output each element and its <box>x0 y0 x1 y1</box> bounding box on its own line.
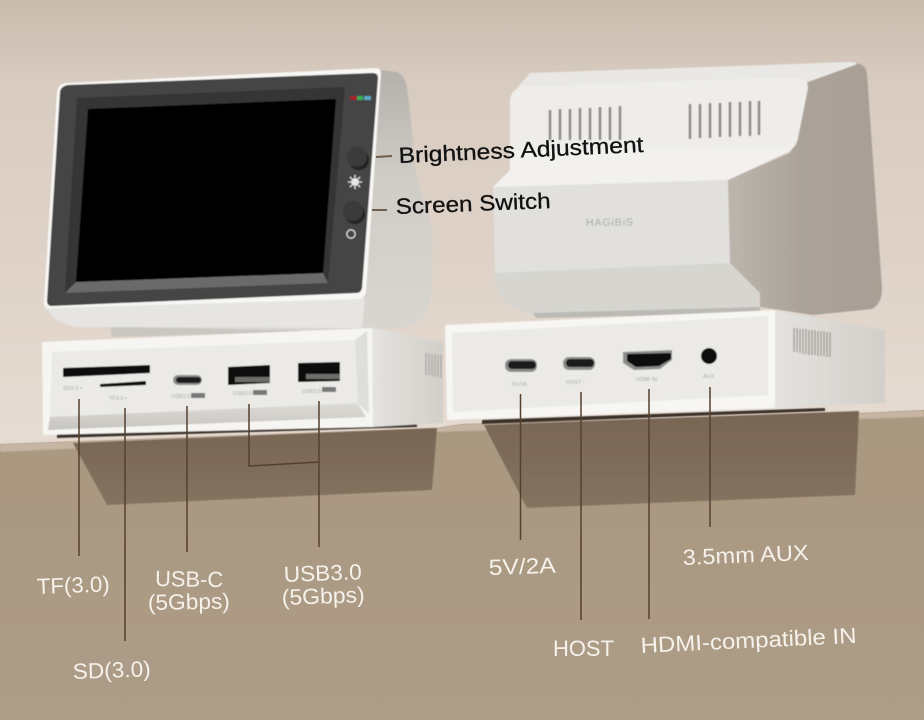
port labels: 5V/2A <box>512 382 527 388</box>
port labels: AUX <box>703 374 715 380</box>
back vented face <box>493 77 808 187</box>
shelf surface <box>0 410 924 720</box>
label: USB-C: USB-C <box>155 566 223 592</box>
label: 5V/2A: 5V/2A <box>488 553 556 580</box>
USB-A port 1 <box>228 365 270 385</box>
dock side <box>372 328 443 427</box>
left device: screen unit <box>44 68 432 337</box>
SD slot <box>63 365 150 377</box>
label: HOST: HOST <box>553 636 614 661</box>
dock underside line <box>57 423 417 438</box>
label: Screen Switch: Screen Switch <box>395 188 551 219</box>
indicator lights <box>350 96 371 100</box>
back step highlight <box>493 148 793 188</box>
dock side <box>775 310 885 408</box>
screen lower bevel <box>65 273 328 293</box>
label: TF(3.0): TF(3.0) <box>36 571 110 599</box>
dock side vents <box>426 353 441 378</box>
label: SD(3.0): SD(3.0) <box>72 656 151 684</box>
label: 3.5mm AUX: 3.5mm AUX <box>682 540 809 570</box>
foot below back unit <box>533 307 760 318</box>
label: Brightness Adjustment: Brightness Adjustment <box>398 132 644 168</box>
USB-A port 2 <box>298 362 340 382</box>
port labels: TF3.0 ▪ <box>109 396 127 402</box>
label: USB3.0 speed: (5Gbps) <box>281 582 365 610</box>
back housing side face <box>727 63 882 315</box>
shadow under left dock <box>73 428 437 505</box>
label: USB-C speed: (5Gbps) <box>148 589 230 615</box>
dock front lower bevel <box>48 403 366 430</box>
back main body <box>493 180 730 275</box>
port labels: HDMI IN <box>636 377 657 383</box>
background wall <box>0 0 924 460</box>
dock front inset <box>452 316 768 412</box>
dock underside line <box>482 408 825 424</box>
dock front <box>42 328 373 435</box>
HOST USB-C port <box>563 357 595 370</box>
port labels: USB3.0 <box>302 389 321 395</box>
label: USB3.0: USB3.0 <box>283 559 362 587</box>
right dock <box>445 310 885 424</box>
port labels: SD3.0 ▪ <box>63 386 82 392</box>
leader lines <box>79 156 710 641</box>
TF slot <box>100 381 146 387</box>
neck below screen <box>110 322 300 337</box>
port labels: HOST ▫ <box>566 380 585 386</box>
brand logo: HAGiBiS <box>586 217 633 229</box>
screen unit chin <box>44 298 365 328</box>
screen unit rear housing <box>44 70 432 331</box>
port labels: USB3.0 <box>171 394 190 400</box>
5V/2A USB-C port <box>505 359 537 372</box>
screen white bezel <box>44 68 381 308</box>
right device: screen unit back <box>493 62 882 318</box>
left vent <box>550 106 620 140</box>
left dock <box>42 328 443 438</box>
dock side vents <box>794 328 830 357</box>
screen display <box>76 99 336 282</box>
switch knob <box>343 201 365 224</box>
shelf front edge highlight <box>0 410 924 452</box>
dock front <box>445 310 775 420</box>
label: HDMI-compatible IN: HDMI-compatible IN <box>640 623 857 658</box>
icon: power <box>347 230 355 238</box>
HDMI port <box>623 350 672 370</box>
brightness knob <box>347 147 369 170</box>
shadow under right dock <box>484 411 859 508</box>
dock front inset <box>50 340 358 417</box>
port labels <box>63 386 336 402</box>
back housing top bevel <box>517 62 857 88</box>
port labels: USB3.0 <box>233 391 252 397</box>
right vent <box>690 101 759 139</box>
USB-C port <box>173 375 202 385</box>
port labels <box>512 374 715 388</box>
back lower band <box>494 263 760 314</box>
icon: sun <box>348 175 362 189</box>
AUX jack <box>701 348 717 364</box>
screen panel grey surround <box>65 87 345 293</box>
dock right bevel <box>355 331 369 414</box>
screen dark frame <box>47 73 378 306</box>
